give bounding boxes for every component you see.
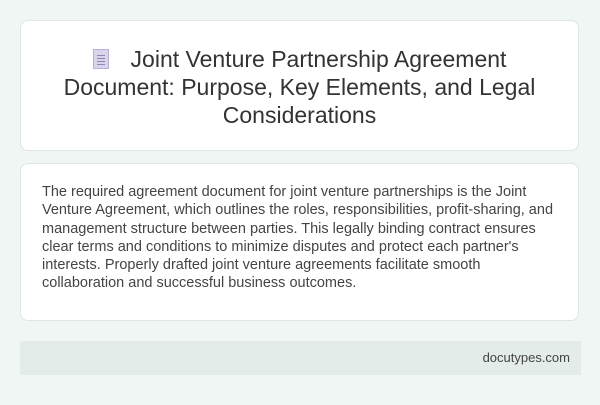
title: Joint Venture Partnership Agreement: [131, 46, 506, 72]
icon: document: [93, 49, 109, 69]
text block: description: management structure between parties. This legally binding contract ensures: [42, 221, 536, 237]
text block: description: interests. Properly drafted joint venture agreements facilitate smooth: [42, 257, 480, 273]
footer text: docutypes.com: [483, 350, 570, 365]
title: Document: Purpose, Key Elements, and Legal: [64, 74, 535, 100]
text block: description: The required agreement document for joint venture partnerships is the Joint: [42, 184, 526, 200]
text block: description: collaboration and successful business outcomes.: [42, 275, 356, 291]
footer bar: [20, 341, 581, 375]
panel: description card: [20, 163, 579, 321]
text block: description: Venture Agreement, which outlines the roles, responsibilities, profit-sharing, and: [42, 202, 553, 218]
title: [64, 46, 535, 128]
title: Considerations: [223, 102, 376, 128]
text block: description: [42, 184, 553, 291]
panel: title card: [20, 20, 579, 151]
text block: description: clear terms and conditions to minimize disputes and protect each partner's: [42, 239, 519, 255]
